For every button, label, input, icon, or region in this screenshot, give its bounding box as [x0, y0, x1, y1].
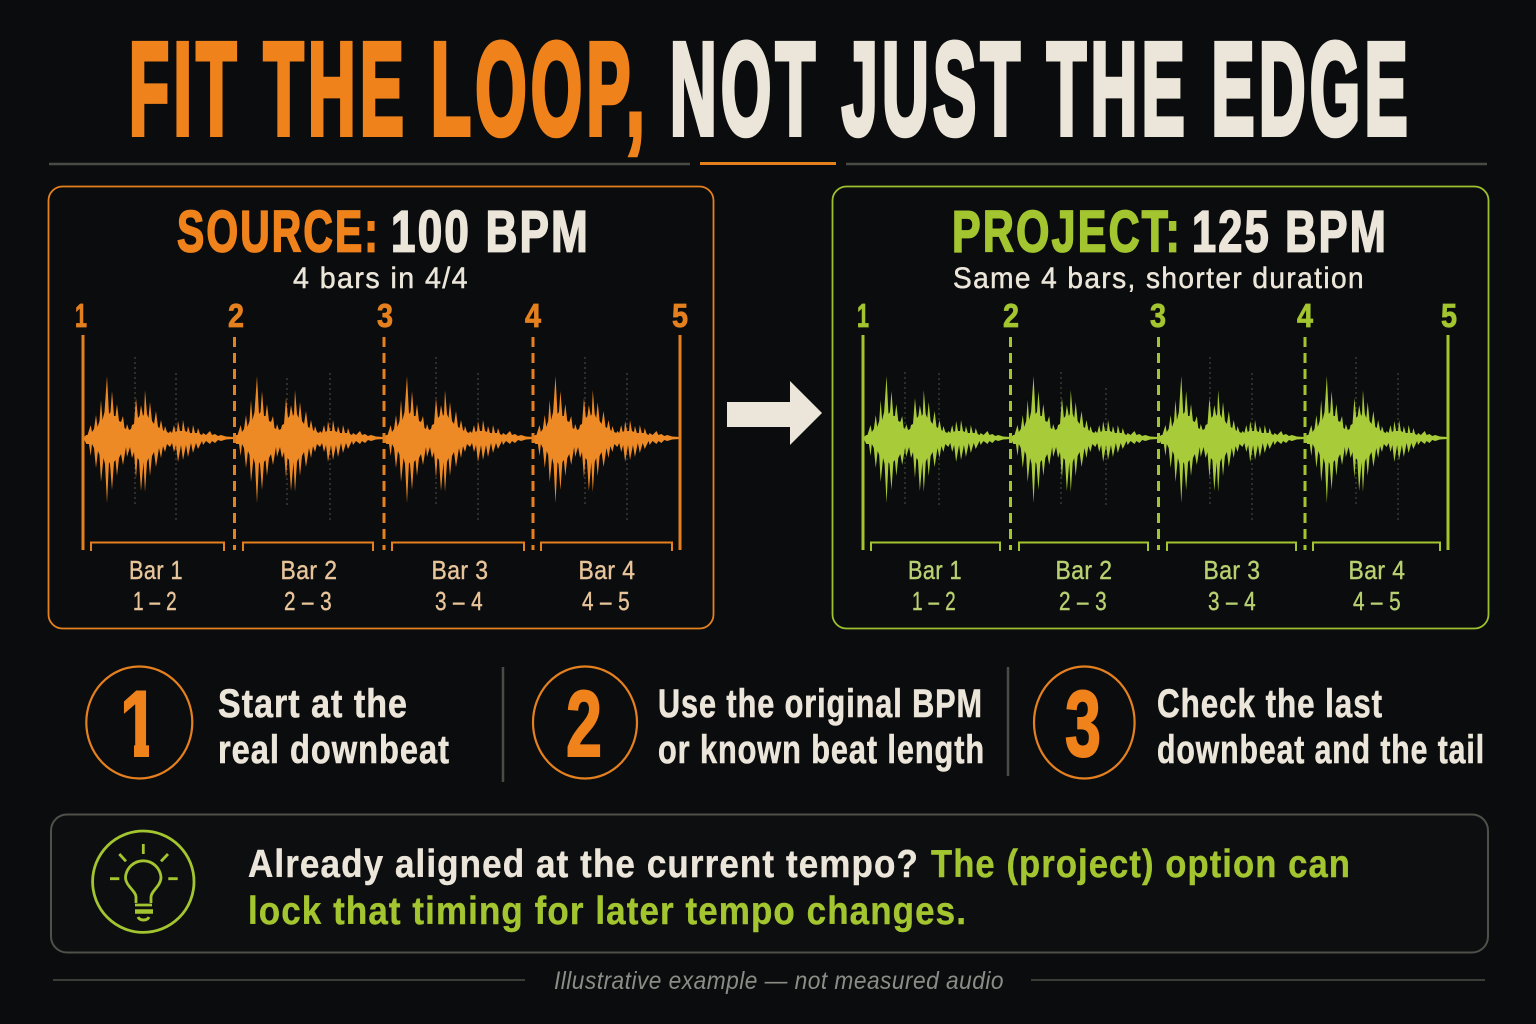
- step 2 badge: 2: [566, 671, 602, 776]
- heading: project tempo: 125 BPM: [1192, 200, 1388, 264]
- arrow: [727, 381, 822, 445]
- bar labels: project: 4 – 5: [1353, 586, 1401, 616]
- step 1 badge: 1: [120, 671, 158, 776]
- beat lines: source: [83, 335, 680, 550]
- waveform: source: [84, 357, 680, 520]
- heading: source tempo: 100 BPM: [391, 200, 590, 264]
- bar labels: project: Bar 3: [1204, 555, 1260, 585]
- bar labels: source: Bar 3: [432, 555, 488, 585]
- step 1: [86, 666, 450, 778]
- panel: project: [832, 186, 1488, 628]
- step 3 badge: [1034, 666, 1135, 778]
- step 2 text: Use the original BPM: [658, 682, 983, 726]
- callout text: lock that timing for later tempo changes.: [248, 890, 967, 933]
- step 2: [533, 666, 985, 778]
- bar brackets: project: [871, 542, 1440, 551]
- panel: source: [48, 186, 714, 628]
- step 1 badge: [86, 666, 192, 778]
- bar labels: project: Bar 1: [908, 555, 962, 585]
- bar labels: project: 1 – 2: [912, 586, 956, 616]
- title: FIT THE LOOP,: [129, 15, 649, 162]
- bar labels: project: 2 – 3: [1059, 586, 1107, 616]
- step 2 badge: [533, 666, 637, 778]
- step 1 text: real downbeat: [218, 728, 450, 772]
- bar labels: source: 2 – 3: [284, 586, 332, 616]
- waveform: project: [864, 357, 1448, 520]
- beat numbers: source: 2: [228, 297, 244, 334]
- subheading: source: 4 bars in 4/4: [293, 262, 469, 295]
- bar labels: project: 3 – 4: [1208, 586, 1256, 616]
- step 1 text: [218, 682, 450, 772]
- callout text: The (project) option can: [931, 843, 1351, 886]
- heading: project tempo: PROJECT:: [952, 200, 1182, 264]
- bar labels: project: [908, 555, 1406, 616]
- callout text: Already aligned at the current tempo?: [248, 843, 919, 886]
- bar brackets: source: [91, 542, 672, 551]
- callout text: [248, 843, 1351, 933]
- beat numbers: source: 5: [672, 297, 688, 334]
- icon: light bulb: [93, 831, 194, 932]
- bar labels: project: Bar 4: [1348, 555, 1406, 585]
- step 3 text: [1157, 682, 1485, 772]
- beat numbers: project: 4: [1297, 297, 1314, 334]
- beat numbers: source: [75, 297, 688, 334]
- step 3 text: Check the last: [1157, 682, 1383, 726]
- bar labels: source: Bar 1: [129, 555, 183, 585]
- beat numbers: project: 3: [1150, 297, 1166, 334]
- beat numbers: project: [857, 297, 1457, 334]
- bar labels: source: Bar 2: [280, 555, 338, 585]
- beat lines: project: [863, 335, 1448, 550]
- beat numbers: source: 4: [525, 297, 542, 334]
- step 1 text: Start at the: [218, 682, 408, 726]
- beat numbers: project: 2: [1003, 297, 1019, 334]
- subheading: project: Same 4 bars, shorter duration: [953, 262, 1365, 295]
- bar labels: source: Bar 4: [578, 555, 636, 585]
- callout: [51, 814, 1488, 952]
- step 2 text: [658, 682, 985, 772]
- step 3: [1034, 666, 1485, 778]
- heading: source tempo: [177, 200, 590, 264]
- heading: source tempo: SOURCE:: [177, 200, 380, 264]
- bar labels: source: 4 – 5: [582, 586, 630, 616]
- bar labels: source: [129, 555, 636, 616]
- bar labels: source: 3 – 4: [435, 586, 483, 616]
- bar labels: project: Bar 2: [1056, 555, 1112, 585]
- step 2 text: or known beat length: [658, 728, 985, 772]
- step 3 badge: 3: [1065, 671, 1101, 776]
- beat numbers: project: 5: [1441, 297, 1457, 334]
- footnote: Illustrative example — not measured audio: [554, 967, 1004, 995]
- bar labels: source: 1 – 2: [133, 586, 177, 616]
- beat numbers: source: 1: [75, 297, 87, 334]
- beat numbers: source: 3: [377, 297, 393, 334]
- beat numbers: project: 1: [857, 297, 869, 334]
